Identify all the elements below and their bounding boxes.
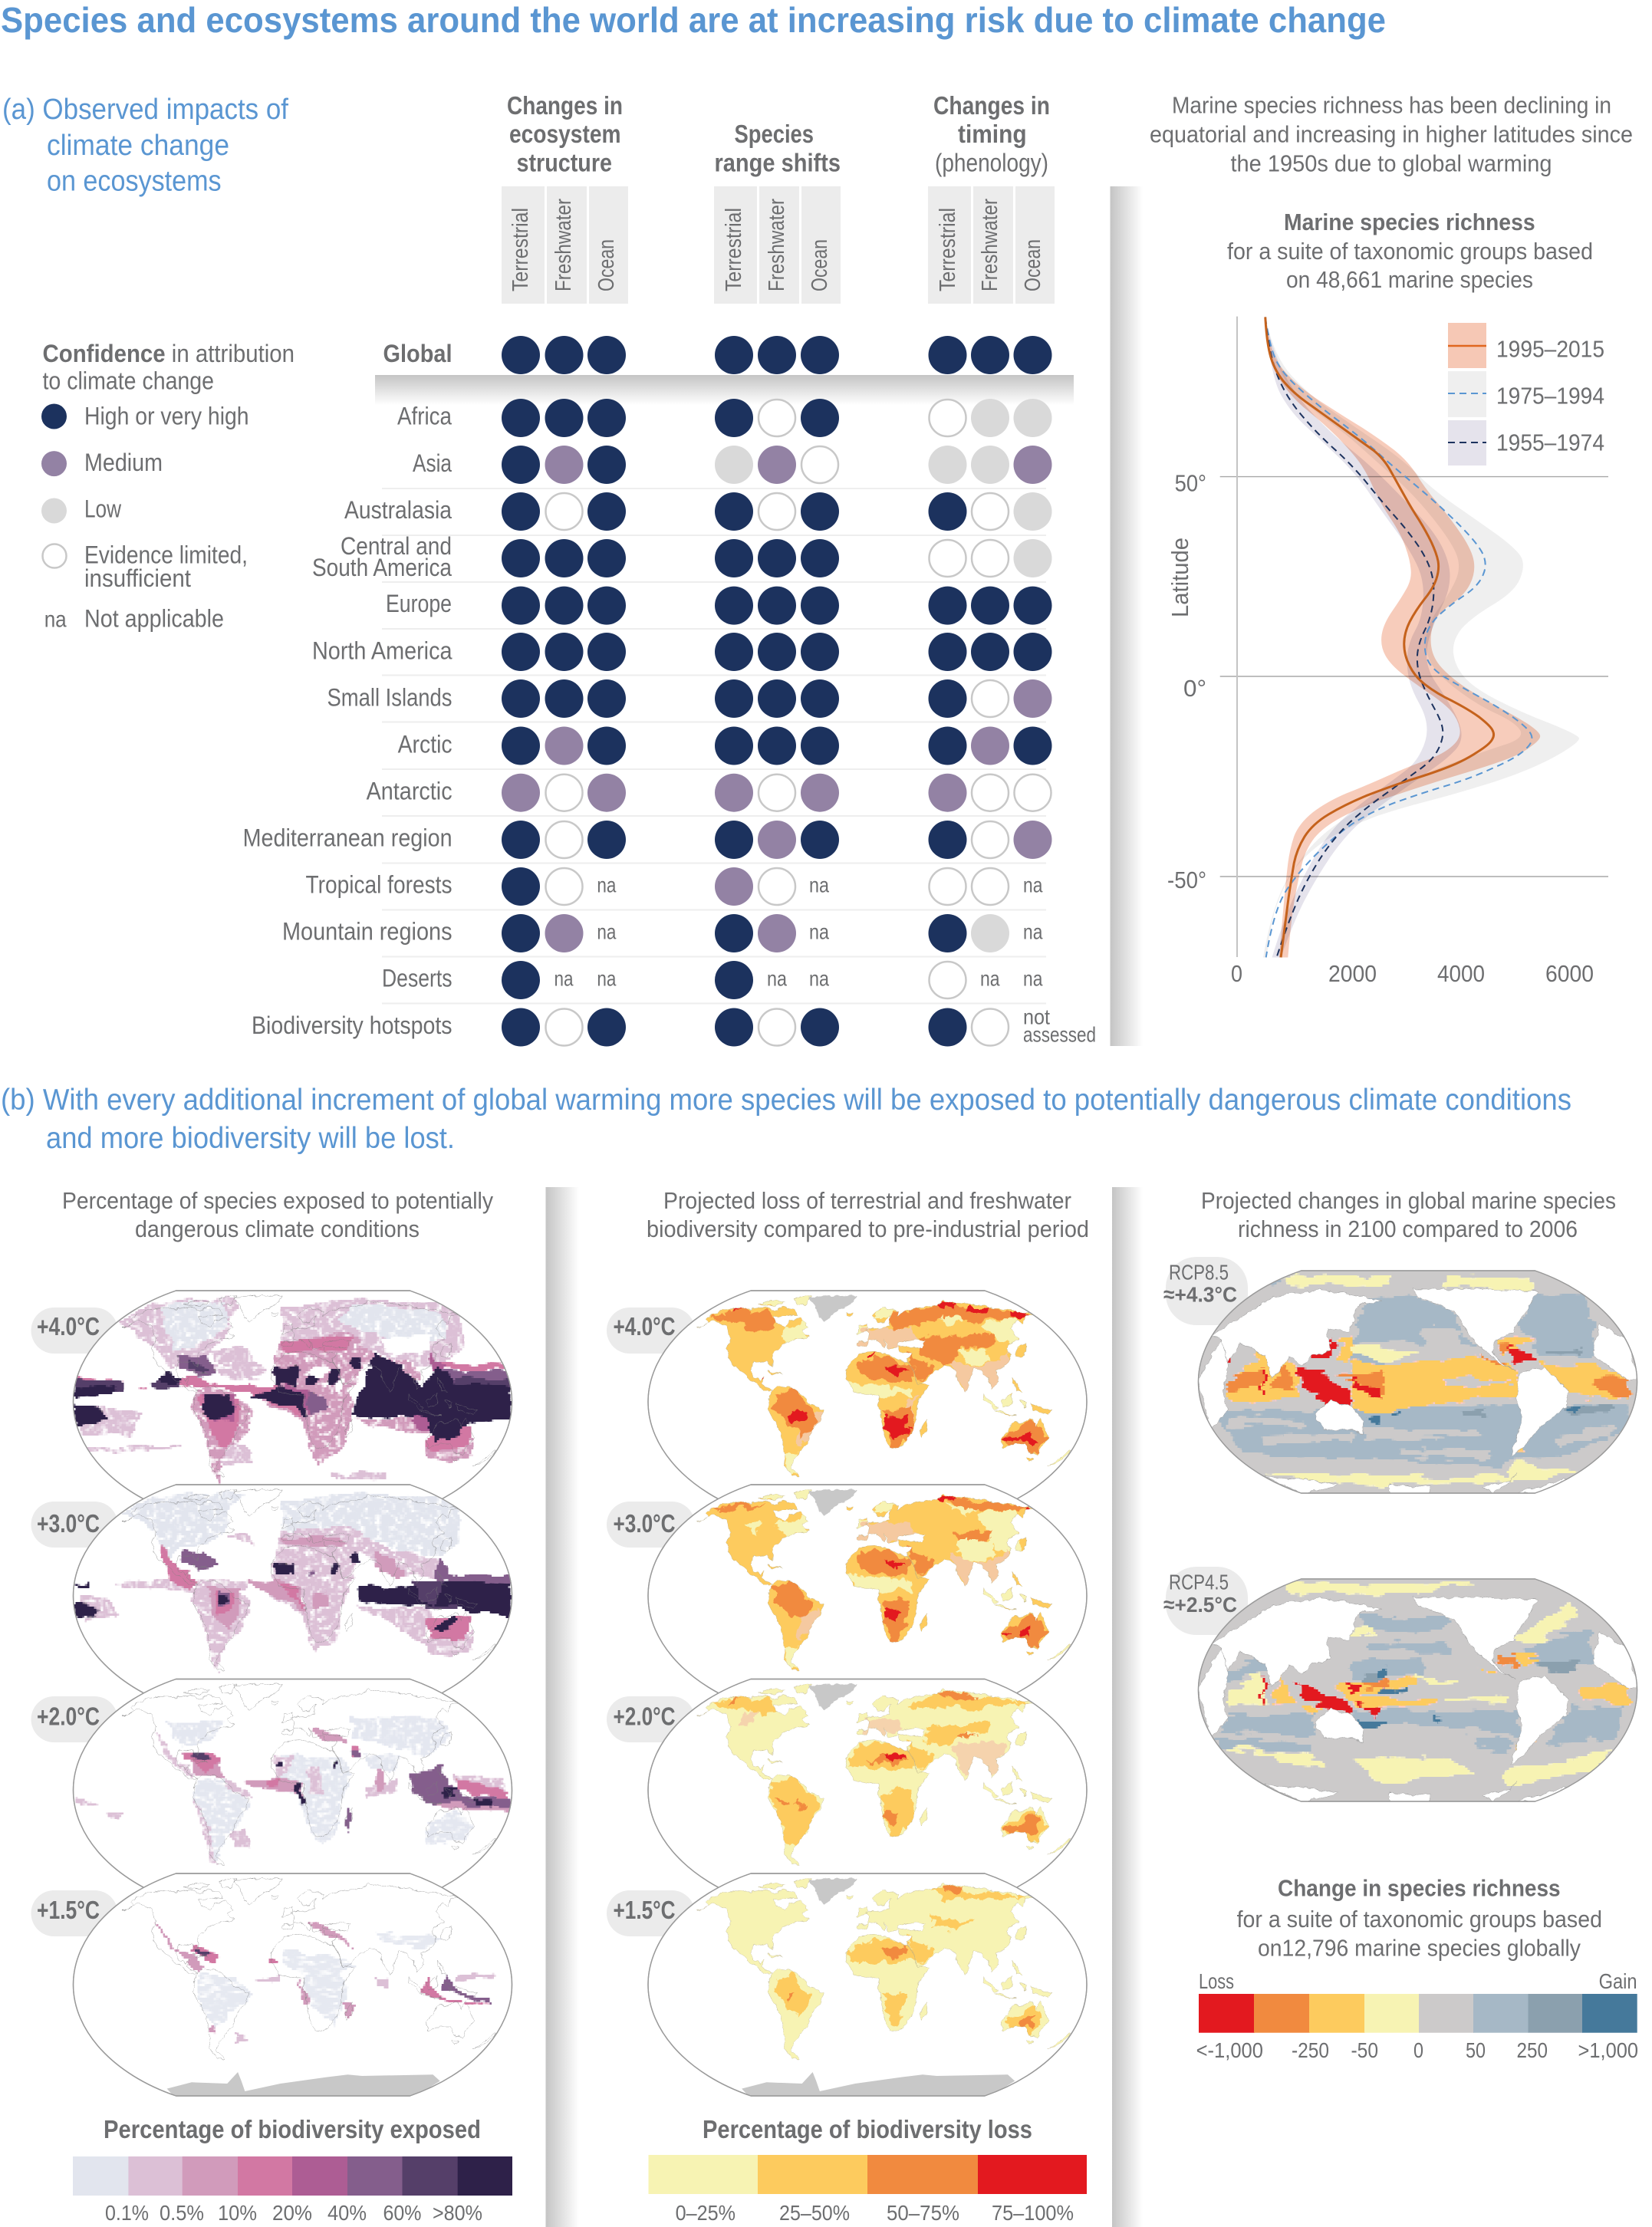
legend: confidence in attribution: to climate change — [43, 367, 214, 395]
legend: confidence in attribution: na — [44, 607, 67, 632]
legend: biodiversity loss: Percentage of biodiversity loss — [703, 2115, 1032, 2143]
legend: change in species richness: Gain — [1599, 1969, 1637, 1993]
confidence dot matrix: na — [1023, 873, 1043, 897]
map: exposure +1.5°C — [31, 1873, 512, 2097]
confidence dot matrix: na — [809, 920, 829, 943]
legend: confidence in attribution: Low — [84, 495, 122, 523]
map: exposure +2.0°C — [31, 1679, 512, 1902]
heading: panel (b): and more biodiversity will be lost. — [46, 1122, 455, 1155]
confidence dot matrix: na — [809, 873, 829, 897]
legend: biodiversity exposed: 10% — [218, 2201, 257, 2225]
legend: biodiversity exposed: 0.5% — [160, 2201, 204, 2225]
row labels: Africa — [397, 403, 452, 430]
map: exposure +3.0°C: +3.0°C — [37, 1509, 100, 1538]
column headings: ecosystem — [509, 120, 621, 148]
row labels: Mountain regions — [282, 918, 452, 946]
legend: biodiversity exposed: >80% — [433, 2201, 482, 2225]
legend: confidence in attribution: High or very high — [84, 403, 249, 430]
confidence dot matrix: na — [1023, 920, 1043, 943]
confidence dot matrix: not — [1023, 1005, 1050, 1029]
confidence dot matrix: na — [597, 873, 617, 897]
map: marine richness RCP8.5: ≈+4.3°C — [1163, 1282, 1237, 1307]
row labels: Deserts — [382, 965, 452, 992]
chart: marine species richness by latitude: 0 — [1231, 960, 1242, 987]
chart legend: 1955–1974 — [1496, 429, 1604, 456]
column headings: Changes in — [507, 91, 623, 120]
row labels: Antarctic — [367, 778, 452, 805]
map: exposure +4.0°C — [31, 1291, 512, 1513]
heading: panel (a): on ecosystems — [47, 166, 222, 198]
legend: change in species richness: -250 — [1292, 2038, 1329, 2062]
sub-column labels: terrestrial, freshwater, ocean — [502, 186, 1055, 304]
legend: confidence in attribution: Not applicable — [84, 604, 224, 632]
confidence dot matrix: na — [554, 966, 574, 991]
column title: marine richness change: richness in 2100 compared to 2006 — [1238, 1215, 1578, 1242]
row labels: Tropical forests — [305, 871, 452, 899]
map: biodiversity loss +3.0°C: +3.0°C — [614, 1509, 675, 1538]
marine richness description: the 1950s due to global warming — [1230, 150, 1552, 176]
row labels: Mediterranean region — [243, 824, 452, 852]
chart: marine species richness by latitude: 6000 — [1545, 960, 1594, 987]
sub-column labels: terrestrial, freshwater, ocean: Ocean — [1021, 239, 1045, 291]
map: marine richness RCP8.5: RCP8.5 — [1169, 1261, 1229, 1284]
legend: change in species richness — [1196, 1875, 1638, 2062]
legend: biodiversity exposed: 40% — [327, 2201, 367, 2225]
column title: marine richness change: Projected changes in global marine species — [1201, 1187, 1616, 1214]
map: biodiversity loss +4.0°C: +4.0°C — [614, 1312, 675, 1340]
chart: marine species richness by latitude: 50° — [1175, 470, 1206, 497]
chart: marine species richness by latitude: 2000 — [1328, 960, 1377, 987]
row labels — [243, 340, 452, 1039]
legend: confidence in attribution: Evidence limited, — [84, 541, 248, 569]
legend: change in species richness: 0 — [1413, 2038, 1423, 2062]
column title: marine richness change — [1201, 1187, 1616, 1242]
map: marine richness RCP4.5: ≈+2.5°C — [1163, 1593, 1237, 1617]
marine richness description — [1150, 92, 1633, 176]
chart heading: marine species richness: for a suite of taxonomic groups based — [1227, 238, 1593, 265]
map: exposure +4.0°C: +4.0°C — [37, 1312, 100, 1340]
row labels: North America — [312, 637, 452, 665]
chart: marine species richness by latitude: 0° — [1183, 675, 1206, 702]
heading: panel (a): climate change — [47, 130, 229, 162]
heading: panel (a) — [2, 94, 288, 198]
legend: change in species richness: for a suite of taxonomic groups based — [1237, 1906, 1602, 1933]
row labels: Small Islands — [327, 684, 452, 712]
heading: panel (b): (b) With every additional increment of global warming more species will be exposed to potentially dangerous climate conditions — [1, 1084, 1571, 1117]
row labels: Global — [383, 340, 452, 367]
chart: marine species richness by latitude: 4000 — [1437, 960, 1485, 987]
legend: biodiversity loss: 0–25% — [676, 2201, 736, 2225]
chart legend: 1995–2015 — [1496, 336, 1604, 362]
row labels: Central and — [341, 532, 452, 560]
legend: change in species richness: 250 — [1517, 2038, 1548, 2062]
sub-column labels: terrestrial, freshwater, ocean: Freshwater — [978, 199, 1002, 291]
sub-column labels: terrestrial, freshwater, ocean: Terrestrial — [722, 208, 746, 291]
chart: marine species richness by latitude — [1167, 317, 1608, 987]
column title: biodiversity loss — [647, 1187, 1089, 1242]
confidence dot matrix: na — [1023, 966, 1043, 991]
legend: confidence in attribution: Medium — [84, 449, 163, 476]
legend: change in species richness: on12,796 marine species globally — [1258, 1935, 1581, 1962]
chart legend — [1448, 323, 1604, 465]
row labels: Biodiversity hotspots — [252, 1012, 452, 1039]
confidence dot matrix: na — [767, 966, 787, 991]
confidence dot matrix — [502, 336, 1096, 1047]
legend: change in species richness: <-1,000 — [1196, 2038, 1263, 2062]
legend: biodiversity exposed: Percentage of biodiversity exposed — [104, 2115, 481, 2143]
chart heading: marine species richness: Marine species richness — [1284, 209, 1535, 235]
sub-column labels: terrestrial, freshwater, ocean: Ocean — [594, 239, 619, 291]
sub-column labels: terrestrial, freshwater, ocean: Freshwater — [765, 199, 789, 291]
chart heading: marine species richness — [1227, 209, 1593, 293]
map: biodiversity loss +3.0°C — [607, 1485, 1087, 1707]
map: biodiversity loss +1.5°C — [607, 1873, 1087, 2097]
confidence dot matrix: na — [809, 966, 829, 991]
heading: panel (b) — [1, 1084, 1571, 1155]
map: biodiversity loss +2.0°C: +2.0°C — [614, 1702, 675, 1730]
map: marine richness RCP4.5: RCP4.5 — [1169, 1571, 1229, 1594]
column headings — [507, 91, 1050, 176]
legend: confidence in attribution — [41, 340, 295, 632]
legend: change in species richness: 50 — [1466, 2038, 1486, 2062]
legend: biodiversity exposed: 20% — [272, 2201, 312, 2225]
row labels: South America — [312, 554, 452, 581]
column title: species exposed: dangerous climate conditions — [135, 1215, 420, 1242]
map: exposure +1.5°C: +1.5°C — [37, 1896, 100, 1924]
column headings: (phenology) — [935, 149, 1048, 176]
column title: biodiversity loss: biodiversity compared to pre-industrial period — [647, 1215, 1089, 1242]
column headings: structure — [517, 149, 612, 176]
legend: biodiversity loss — [649, 2115, 1087, 2225]
column title: species exposed: Percentage of species exposed to potentially — [62, 1187, 493, 1214]
legend: biodiversity exposed — [73, 2115, 512, 2225]
sub-column labels: terrestrial, freshwater, ocean: Ocean — [808, 239, 832, 291]
legend: change in species richness: Loss — [1199, 1969, 1234, 1993]
sub-column labels: terrestrial, freshwater, ocean: Terrestrial — [508, 208, 533, 291]
legend: change in species richness: Change in species richness — [1278, 1875, 1561, 1902]
title: Species and ecosystems around the world are at increasing risk due to climate change — [1, 0, 1386, 40]
row labels: Asia — [413, 449, 452, 477]
legend: change in species richness: >1,000 — [1578, 2038, 1638, 2062]
legend: biodiversity exposed: 60% — [383, 2201, 422, 2225]
shadow band under global row — [375, 375, 1074, 405]
chart heading: marine species richness: on 48,661 marine species — [1286, 266, 1533, 293]
legend: confidence in attribution: insufficient — [84, 564, 191, 592]
map: marine richness RCP4.5 — [1163, 1567, 1645, 1812]
map: biodiversity loss +2.0°C — [607, 1679, 1087, 1902]
legend: biodiversity loss: 75–100% — [992, 2201, 1074, 2225]
sub-column labels: terrestrial, freshwater, ocean: Freshwater — [551, 199, 576, 291]
map: exposure +3.0°C — [31, 1485, 512, 1707]
panel divider shadows — [546, 186, 1143, 2227]
column headings: Species — [735, 120, 814, 148]
map: marine richness RCP8.5 — [1163, 1257, 1645, 1504]
column title: biodiversity loss: Projected loss of terrestrial and freshwater — [663, 1187, 1071, 1214]
map: biodiversity loss +1.5°C: +1.5°C — [614, 1896, 675, 1924]
legend: biodiversity loss: 50–75% — [887, 2201, 959, 2225]
confidence dot matrix: na — [597, 966, 617, 991]
chart legend: 1975–1994 — [1496, 382, 1604, 410]
legend: change in species richness: -50 — [1351, 2038, 1378, 2062]
column title: species exposed — [62, 1187, 493, 1242]
row labels: Europe — [386, 590, 452, 617]
row labels: Arctic — [398, 731, 452, 758]
column headings: timing — [958, 120, 1027, 148]
chart: marine species richness by latitude: -50° — [1167, 867, 1206, 893]
legend: biodiversity exposed: 0.1% — [105, 2201, 149, 2225]
marine richness description: Marine species richness has been declining in — [1172, 92, 1611, 118]
heading: panel (a): (a) Observed impacts of — [2, 94, 288, 126]
confidence dot matrix: na — [980, 966, 1000, 991]
column headings: Changes in — [933, 91, 1050, 120]
map: biodiversity loss +4.0°C — [607, 1291, 1087, 1513]
map: exposure +2.0°C: +2.0°C — [37, 1702, 100, 1730]
row labels: Australasia — [344, 496, 452, 524]
legend: biodiversity loss: 25–50% — [779, 2201, 850, 2225]
legend: confidence in attribution: Confidence in attribution — [43, 340, 295, 367]
column headings: range shifts — [715, 149, 841, 176]
sub-column labels: terrestrial, freshwater, ocean: Terrestrial — [936, 208, 960, 291]
confidence dot matrix: assessed — [1023, 1023, 1096, 1047]
chart: marine species richness by latitude: Latitude — [1167, 538, 1193, 617]
confidence dot matrix: na — [597, 920, 617, 943]
